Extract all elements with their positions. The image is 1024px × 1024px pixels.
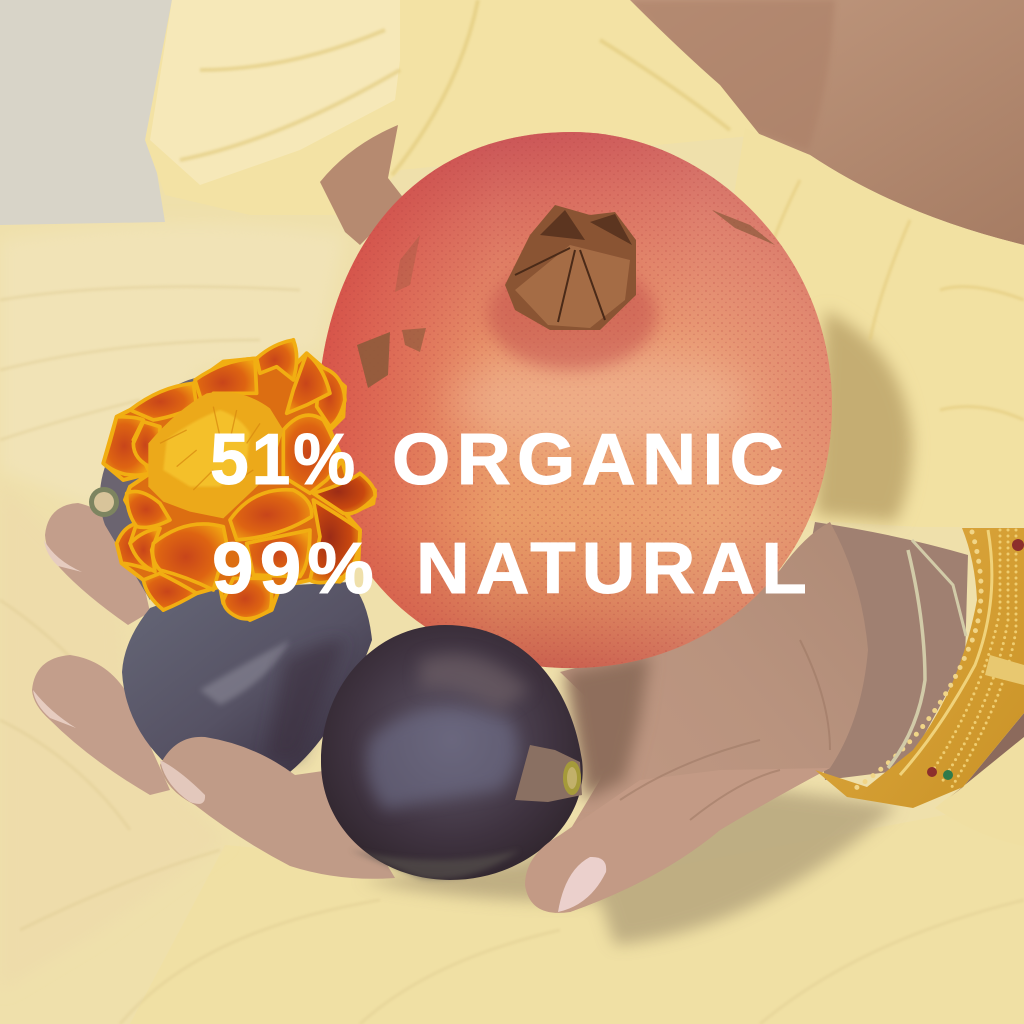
fig stem end bbox=[89, 487, 119, 517]
pomegranate bbox=[318, 132, 832, 668]
finger: middle bbox=[32, 655, 170, 795]
pomegranate scars bbox=[357, 210, 775, 388]
headline line 1: ORGANIC bbox=[392, 420, 790, 500]
background: grey ground top left bbox=[0, 0, 172, 225]
headline line 2: 99% bbox=[212, 529, 380, 609]
headline line 2 bbox=[212, 529, 813, 609]
headline line 1 bbox=[210, 420, 790, 500]
smooth bright band bbox=[900, 530, 992, 775]
bracelets bbox=[815, 528, 1024, 808]
sleeve: yellow blouse top bbox=[145, 0, 760, 215]
palm shadow bbox=[565, 655, 650, 800]
flower silhouette bbox=[103, 340, 375, 620]
finger: lower bbox=[160, 737, 395, 879]
shadow under hand bbox=[360, 780, 898, 945]
beaded band bbox=[850, 532, 981, 792]
silver chain bbox=[888, 550, 925, 768]
fig: back left bbox=[122, 582, 372, 772]
enamel flowers bbox=[927, 539, 1024, 780]
clasp bbox=[985, 655, 1024, 685]
wrist in shadow bbox=[800, 522, 968, 780]
cloth bottom right bbox=[935, 735, 1024, 846]
sleeve: right cloth bbox=[700, 128, 1024, 527]
flower centre bbox=[148, 392, 283, 518]
thumb bbox=[525, 640, 830, 913]
finger: top bbox=[44, 503, 150, 625]
headline bbox=[210, 420, 813, 609]
torso skin top right bbox=[628, 0, 1024, 245]
fig: small one behind the flower bbox=[89, 378, 195, 600]
marigold flower bbox=[103, 340, 375, 620]
headline line 2: NATURAL bbox=[416, 529, 813, 609]
headline line 1: 51% bbox=[210, 420, 358, 500]
fig: front bbox=[321, 625, 583, 880]
granulated band bbox=[930, 530, 1016, 790]
safety pin bbox=[912, 540, 966, 636]
palm bbox=[540, 522, 868, 912]
fig stem bbox=[515, 745, 582, 802]
pomegranate crown bbox=[505, 205, 636, 330]
upper arm skin bbox=[320, 125, 405, 245]
